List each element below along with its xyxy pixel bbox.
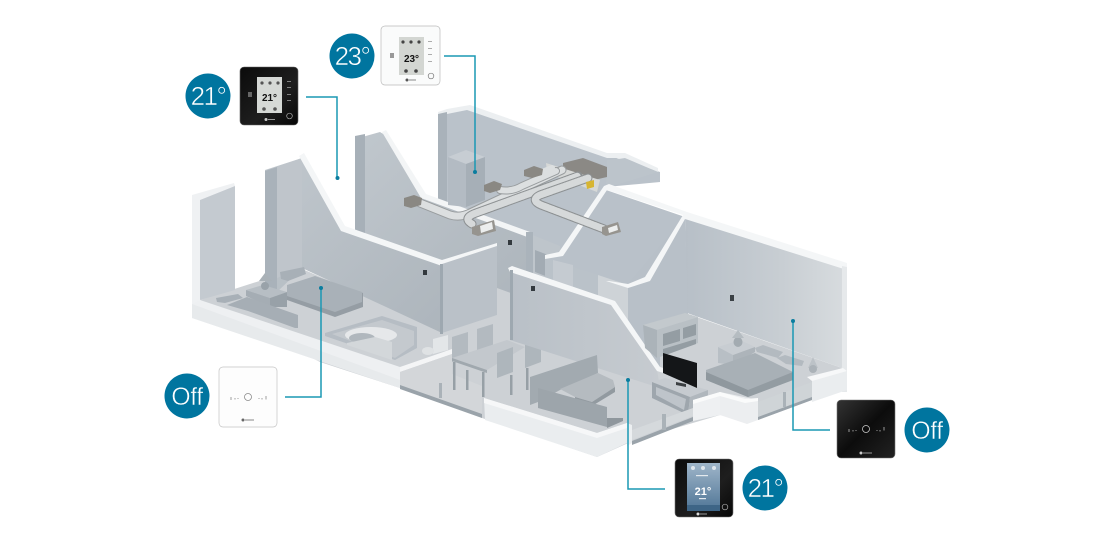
- sofa: [530, 355, 623, 428]
- shelving unit: [643, 313, 698, 358]
- connector: black thermostat 21 to left room: [306, 97, 340, 180]
- television and stand: [652, 353, 708, 415]
- badge: 21 degrees bottom: 21°: [748, 473, 783, 503]
- main bedroom furniture: [706, 330, 818, 397]
- thermostat: white with e-ink display: 23°: [404, 54, 419, 65]
- duct boxes: [404, 195, 422, 208]
- badge: off left: Off: [171, 383, 203, 411]
- badge: 21 degrees left: 21°: [191, 81, 226, 111]
- slab left front: [192, 300, 482, 418]
- bed left small: [216, 294, 298, 328]
- badge: off right: Off: [911, 417, 943, 445]
- badge: 21 degrees bottom: [742, 466, 788, 510]
- badge: 23 degrees: 23°: [335, 41, 370, 71]
- cabinet: [448, 150, 485, 207]
- slab right front: [484, 368, 847, 457]
- thermostat: white with e-ink display: [381, 26, 440, 85]
- connector: colour thermostat to living room: [626, 378, 665, 489]
- thermostat: black with colour display: 21°: [695, 486, 711, 498]
- floor: [200, 250, 842, 457]
- badge: 21 degrees left: [186, 74, 230, 118]
- floor plan: [192, 105, 847, 457]
- thermostat: white touch off: [219, 367, 277, 427]
- thermostat: black with e-ink display: 21°: [262, 93, 277, 104]
- bathroom: [325, 316, 448, 360]
- dining table and chairs: [452, 324, 541, 397]
- bed left large: [280, 267, 363, 317]
- right wing walls: [545, 184, 847, 392]
- ducted air conditioning unit: [404, 158, 621, 236]
- connector: white off thermostat to left bedroom: [285, 286, 323, 397]
- bedside table and lamp left: [246, 273, 287, 307]
- flexible ducts: [420, 168, 604, 229]
- thermostat: black with e-ink display: [240, 67, 298, 125]
- back rooms and rear walls: [355, 105, 660, 300]
- far left wall: [192, 183, 235, 305]
- thermostat: black with colour display: [675, 459, 733, 517]
- yellow control box: [586, 180, 594, 189]
- badge: 23 degrees: [330, 34, 374, 78]
- badge: off left: [164, 374, 210, 418]
- foreground wall living room: [508, 266, 670, 388]
- thermostat: black touch off: [837, 400, 895, 458]
- connector: black off thermostat to main bedroom: [791, 319, 830, 430]
- left bedroom walls: [265, 153, 512, 334]
- connector: white thermostat 23 to duct unit: [444, 56, 477, 174]
- badge: off right: [904, 408, 950, 452]
